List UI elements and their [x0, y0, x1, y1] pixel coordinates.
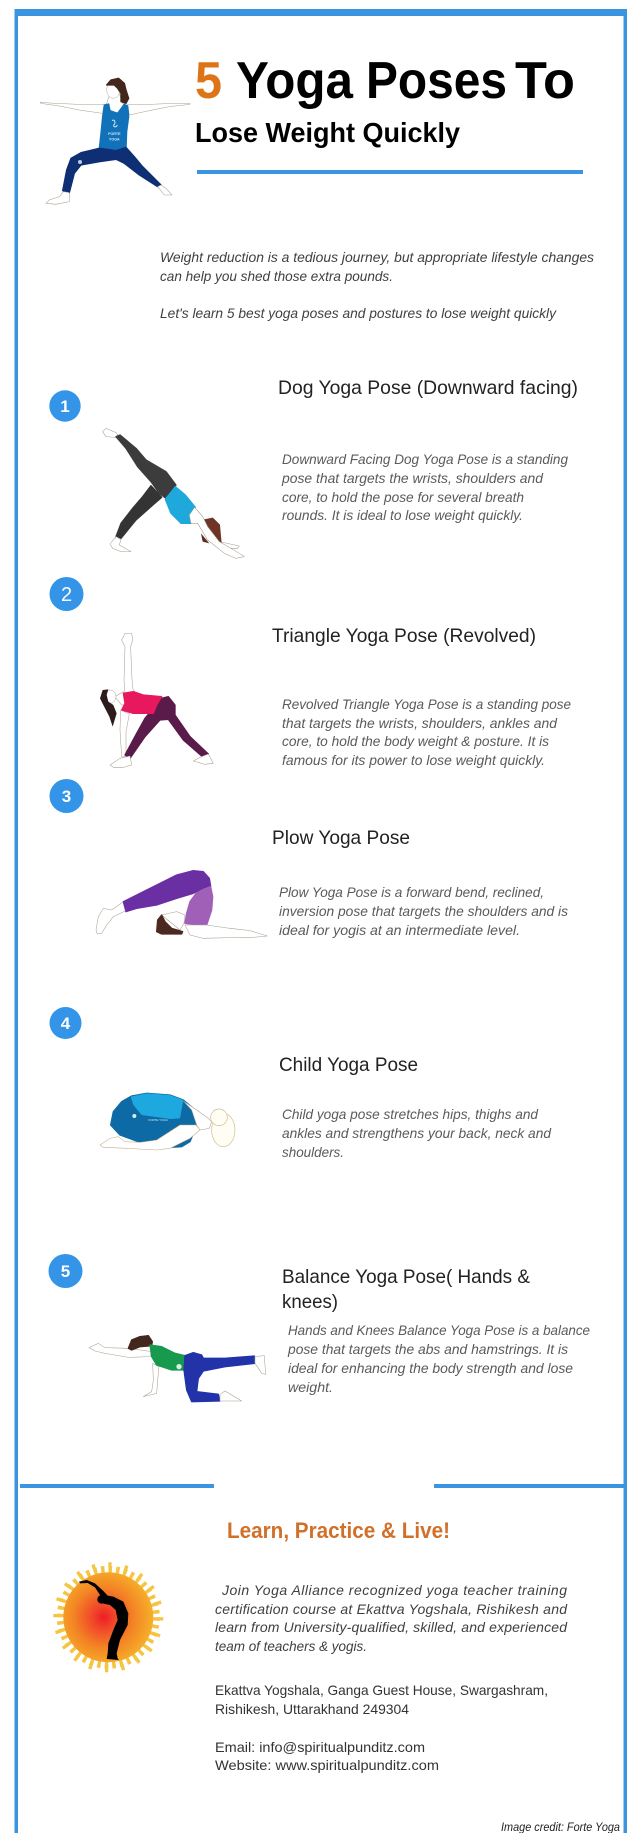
intro text: can help you shed those extra pounds. [160, 268, 393, 284]
number badge 3: 3 [62, 787, 71, 806]
panel: pose 3 [50, 779, 568, 938]
panel: pose 1 [49, 377, 578, 558]
intro text: Let's learn 5 best yoga poses and postures to lose weight quickly [160, 305, 557, 321]
title underline [197, 170, 583, 174]
title: Yoga [236, 52, 354, 110]
description 1: Downward Facing Dog Yoga Pose is a standing [282, 451, 568, 467]
number badge 4: 4 [61, 1014, 71, 1033]
text: course description [215, 1582, 568, 1654]
panel: pose 2 [50, 577, 571, 768]
description 2: that targets the wrists, shoulders, ankles and [282, 715, 558, 731]
text: course description: team of teachers & yogis. [215, 1638, 367, 1654]
description 2: famous for its power to lose weight quickly. [282, 752, 545, 768]
description 4: Child yoga pose stretches hips, thighs and [282, 1106, 539, 1122]
description 5: ideal for enhancing the body strength and lose [288, 1360, 573, 1376]
text: address: Rishikesh, Uttarakhand 249304 [215, 1701, 409, 1717]
text: address [215, 1682, 548, 1717]
description 4 [282, 1106, 552, 1160]
number badge 2 [50, 577, 84, 611]
text: contact details: Website: www.spiritualpunditz.com [215, 1757, 439, 1773]
icon: revolved triangle figure [100, 633, 213, 767]
description 2 [282, 696, 571, 768]
heading: learn practice live: Learn, Practice & Live! [227, 1518, 450, 1543]
heading 5: knees) [282, 1291, 338, 1313]
number badge 2: 2 [61, 584, 72, 606]
icon: downward dog figure [103, 428, 244, 558]
number badge 1 [49, 390, 81, 422]
section divider [20, 1484, 627, 1488]
icon: warrior pose figure: FORTE [108, 132, 121, 136]
description 3: inversion pose that targets the shoulders and is [279, 903, 568, 919]
number badge 3 [50, 779, 84, 813]
description 5: pose that targets the abs and hamstrings. It is [287, 1341, 568, 1357]
icon: warrior pose figure [40, 78, 190, 204]
icon: plow pose figure [96, 871, 267, 938]
text: course description: certification course at Ekattva Yogshala, Rishikesh and [215, 1601, 568, 1617]
description 5: Hands and Knees Balance Yoga Pose is a balance [288, 1322, 590, 1338]
icon: child pose figure: FORTE YOGA [148, 1118, 168, 1122]
description 1 [281, 451, 568, 523]
heading 2: Triangle Yoga Pose (Revolved) [272, 625, 536, 647]
number badge 4 [50, 1007, 82, 1039]
text: course description: learn from University-qualified, skilled, and experienced [215, 1619, 568, 1635]
intro text [160, 249, 594, 321]
text: contact details [215, 1739, 439, 1773]
text: course description: Join Yoga Alliance recognized yoga teacher training [221, 1582, 567, 1598]
description 2: Revolved Triangle Yoga Pose is a standing pose [282, 696, 571, 712]
description 5: weight. [288, 1379, 333, 1395]
number badge 5 [48, 1254, 82, 1288]
heading 5 [282, 1266, 530, 1313]
icon: warrior pose figure: YOGA [109, 138, 120, 142]
text: address: Ekattva Yogshala, Ganga Guest House, Swargashram, [215, 1682, 548, 1698]
description 1: pose that targets the wrists, shoulders and [281, 470, 544, 486]
description 1: core, to hold the pose for several breath [282, 489, 524, 505]
heading 4: Child Yoga Pose [279, 1054, 418, 1076]
heading 5: Balance Yoga Pose( Hands & [282, 1266, 530, 1288]
icon: sun logo with yoga silhouette [57, 1566, 159, 1668]
number badge 1: 1 [60, 397, 70, 416]
text: contact details: Email: info@spiritualpunditz.com [215, 1739, 425, 1755]
description 1: rounds. It is ideal to lose weight quickly. [282, 507, 523, 523]
description 5 [287, 1322, 590, 1395]
description 4: shoulders. [282, 1144, 344, 1160]
heading 1: Dog Yoga Pose (Downward facing) [278, 377, 578, 399]
description 3 [279, 884, 568, 938]
description 4: ankles and strengthens your back, neck and [282, 1125, 552, 1141]
title: 5 [195, 52, 222, 110]
title: To [515, 52, 575, 110]
intro text: Weight reduction is a tedious journey, but appropriate lifestyle changes [160, 249, 594, 265]
title: Poses [366, 52, 507, 110]
panel: pose 4 [50, 1007, 552, 1160]
icon: child pose figure [100, 1093, 235, 1150]
icon: balance pose figure [89, 1336, 266, 1402]
number badge 5: 5 [61, 1262, 70, 1281]
description 3: Plow Yoga Pose is a forward bend, reclined, [279, 884, 544, 900]
description 2: core, to hold the body weight & posture. It is [282, 733, 549, 749]
title: Lose Weight Quickly [195, 117, 460, 148]
description 3: ideal for yogis at an intermediate level. [279, 922, 520, 938]
heading 3: Plow Yoga Pose [272, 827, 410, 849]
panel: pose 5 [48, 1254, 590, 1402]
title [195, 52, 575, 148]
